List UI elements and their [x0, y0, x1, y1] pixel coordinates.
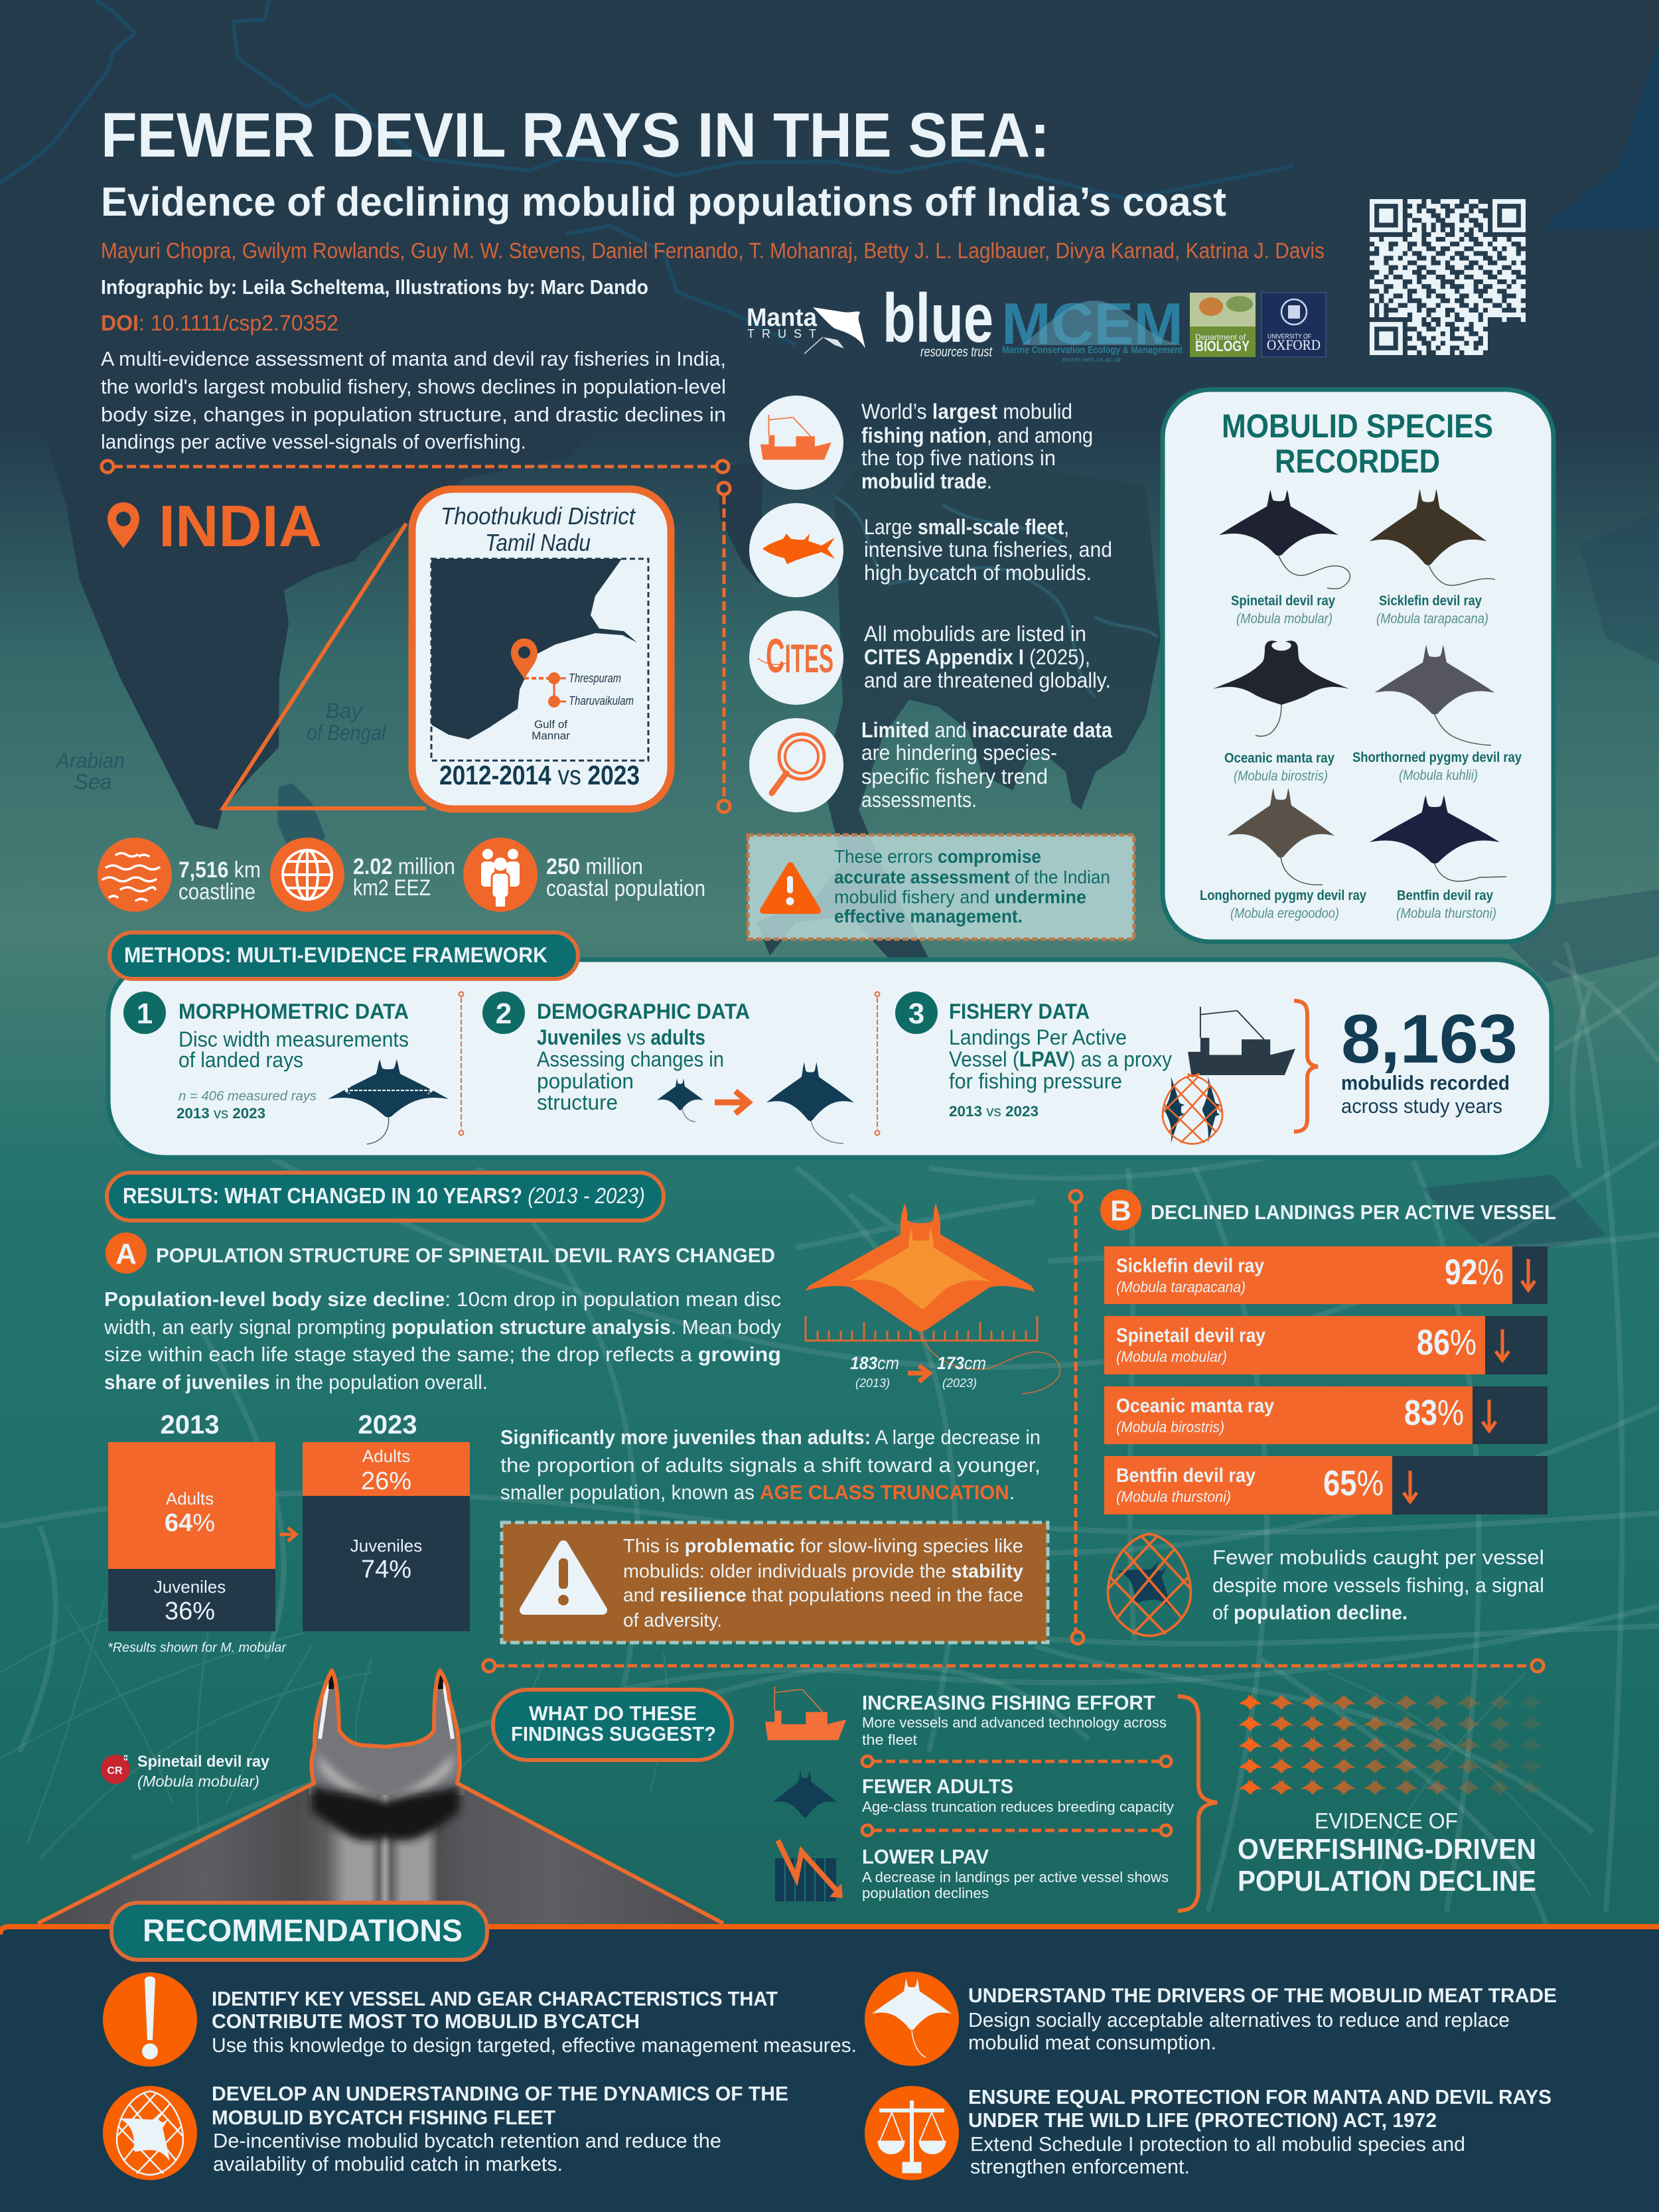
method 1: morphometric data: n = 406 measured rays [179, 1089, 317, 1104]
icon: location pin [108, 502, 139, 548]
fact: largest fishing nation: the top five nations in [861, 446, 1056, 470]
fact: CITES: All mobulids are listed in [864, 622, 1086, 646]
species: spinetail devil ray [1219, 490, 1350, 627]
chart: stacked bars 2013 vs 2023: 26% [361, 1467, 411, 1495]
intro text block [101, 347, 726, 453]
heading pill: recommendations: RECOMMENDATIONS [143, 1913, 463, 1948]
fact: limited data: Limited and inaccurate data [861, 718, 1112, 742]
intro text block: body size, changes in population structure, and drastic declines in [101, 403, 726, 426]
heading pill: methods [109, 932, 578, 979]
finding: increasing fishing effort: the fleet [862, 1732, 917, 1748]
species: oceanic manta ray: (Mobula birostris) [1234, 769, 1328, 784]
species status label: Spinetail devil ray [137, 1753, 270, 1771]
inset map [431, 559, 648, 761]
intro text block: the world's largest mobulid fishery, shows declines in population-level [101, 375, 726, 398]
species: longhorned pygmy devil ray [1200, 788, 1366, 921]
species: shorthorned pygmy devil ray: Shorthorned pygmy devil ray [1352, 750, 1522, 765]
conclusion text [1238, 1808, 1536, 1897]
method 2: demographic data: population [537, 1069, 634, 1093]
callout: problematic: This is problematic for slow-living species like [623, 1536, 1023, 1557]
logo: Manta Trust: TRUST [747, 327, 816, 340]
stat: EEZ [270, 838, 455, 912]
bar: oceanic manta 83%: Oceanic manta ray [1116, 1395, 1274, 1417]
callout: problematic: mobulids: older individuals provide the stability [623, 1561, 1023, 1582]
fact: CITES: and are threatened globally. [864, 668, 1111, 692]
zoom triangle lines [223, 524, 426, 808]
stat: 8,163 mobulids [1341, 1001, 1518, 1118]
bar: spinetail 86%: 86% [1417, 1323, 1477, 1363]
logo: Blue Resources Trust: blue [883, 280, 993, 357]
species status label [101, 1753, 270, 1790]
species: bentfin devil ray [1370, 795, 1506, 921]
map: India landmass [0, 0, 763, 830]
illustration: large spinetail devil ray [38, 1666, 723, 1923]
body size text: size within each life stage stayed the same; the drop reflects a growing [104, 1343, 781, 1366]
label: Arabian Sea: Arabian [55, 749, 125, 773]
section A [104, 1203, 1060, 1655]
fact: small-scale fleet: high bycatch of mobulids. [864, 561, 1092, 585]
stat: coastal population [463, 838, 705, 912]
stat: 8,163 mobulids: mobulids recorded [1341, 1071, 1510, 1094]
inset title: Thoothukudi District [441, 502, 636, 530]
fact: largest fishing nation: fishing nation, and among [861, 423, 1093, 447]
species: bentfin devil ray: Bentfin devil ray [1397, 888, 1493, 903]
label: Bay of Bengal [307, 699, 386, 745]
recommendation: vessel and gear [103, 1972, 857, 2067]
bar: oceanic manta 83%: 83% [1404, 1393, 1464, 1433]
callout: problematic [502, 1522, 1048, 1643]
method 3: fishery data [895, 992, 1295, 1144]
panel: mobulid species recorded [1163, 390, 1553, 942]
illustration: ray with ruler [805, 1203, 1060, 1394]
callout: errors warning: These errors compromise [834, 846, 1041, 867]
fact: CITES: CITES [766, 630, 833, 683]
separator [862, 1756, 1171, 1767]
recommendation: equal protection: Extend Schedule I protection to all mobulid species and [970, 2132, 1465, 2156]
logo: Department of Biology [1190, 293, 1256, 357]
recommendation: meat trade: UNDERSTAND THE DRIVERS OF THE MOBULID MEAT TRADE [968, 1984, 1557, 2007]
fact: small-scale fleet [749, 503, 1112, 597]
separator [862, 1825, 1171, 1836]
callout: errors warning: effective management. [834, 906, 1023, 926]
brace: findings [1178, 1696, 1217, 1911]
finding: lower LPAV: population declines [862, 1885, 989, 1901]
stat: coastal population: coastal population [546, 876, 705, 901]
credits: Infographic by: Leila Scheltema, Illustrations by: Marc Dando [101, 275, 648, 299]
brace [1294, 1001, 1318, 1132]
recommendation: bycatch fleet: availability of mobulid catch in markets. [213, 2152, 563, 2175]
bar: spinetail 86% [1104, 1316, 1548, 1374]
method 2: demographic data: DEMOGRAPHIC DATA [537, 999, 750, 1023]
fact: limited data: specific fishery trend [861, 765, 1048, 788]
inset map: Gulf of [534, 718, 567, 731]
method 1: morphometric data: 1 [137, 997, 153, 1030]
bar: bentfin 65% [1104, 1456, 1548, 1514]
method 3: fishery data: Vessel (LPAV) as a proxy [949, 1047, 1172, 1071]
badge A [106, 1232, 147, 1274]
icon: fishing boat [1188, 1007, 1295, 1075]
recommendation: equal protection: UNDER THE WILD LIFE (PROTECTION) ACT, 1972 [968, 2108, 1437, 2132]
label: Bay of Bengal: of Bengal [307, 721, 386, 745]
recommendation: equal protection: strengthen enforcement. [970, 2155, 1190, 2178]
heading pill: results [107, 1173, 664, 1220]
recommendation: meat trade: mobulid meat consumption. [968, 2031, 1216, 2054]
panel title: MOBULID SPECIES [1222, 407, 1493, 445]
method 3: fishery data: 2013 vs 2023 [949, 1103, 1039, 1120]
illustration: ray with ruler: 173cm [937, 1353, 986, 1373]
inset title: Tamil Nadu [485, 529, 591, 556]
logo: Blue Resources Trust: resources trust [920, 344, 993, 360]
method 1: morphometric data: 2013 vs 2023 [177, 1105, 265, 1122]
finding: increasing fishing effort: INCREASING FISHING EFFORT [862, 1691, 1155, 1714]
logo: MCEM: mcem.web.ox.ac.uk [1062, 356, 1121, 364]
stat: coastal population: 250 million [546, 854, 643, 879]
recommendation: bycatch fleet: DEVELOP AN UNDERSTANDING OF THE DYNAMICS OF THE [212, 2082, 788, 2105]
heading pill: what do these findings suggest [493, 1690, 732, 1760]
heading pill: results: RESULTS: WHAT CHANGED IN 10 YEARS? (2013 - 2023) [123, 1183, 645, 1208]
recommendation: vessel and gear: CONTRIBUTE MOST TO MOBULID BYCATCH [212, 2010, 640, 2033]
finding: lower LPAV: A decrease in landings per active vessel shows [862, 1869, 1169, 1885]
fact: largest fishing nation [749, 396, 1093, 493]
title: FEWER DEVIL RAYS IN THE SEA: [101, 100, 1050, 171]
callout: errors warning: mobulid fishery and undermine [834, 887, 1086, 907]
bar: sicklefin 92%: Sicklefin devil ray [1116, 1255, 1264, 1277]
logo: MCEM: Marine Conservation Ecology & Management [1002, 344, 1183, 356]
species status label: CR [107, 1765, 123, 1777]
finding: increasing fishing effort [765, 1686, 1167, 1748]
inset years: 2012-2014 vs 2023 [439, 760, 640, 790]
recommendation: bycatch fleet: MOBULID BYCATCH FISHING FLEET [212, 2106, 555, 2129]
chart: stacked bars 2013 vs 2023: Adults [362, 1446, 410, 1466]
logo: Manta Trust [747, 304, 865, 354]
finding: increasing fishing effort: More vessels and advanced technology across [862, 1714, 1167, 1731]
conclusion text: EVIDENCE OF [1315, 1808, 1458, 1833]
logo: Manta Trust: Manta [747, 304, 818, 332]
intro text block: A multi-evidence assessment of manta and devil ray fisheries in India, [101, 347, 726, 370]
species: sicklefin devil ray [1370, 489, 1495, 627]
callout: problematic: of adversity. [623, 1610, 722, 1631]
chart: stacked bars 2013 vs 2023: *Results shown for M. mobular [108, 1641, 287, 1655]
panel title [1222, 407, 1493, 480]
logo: Department of Biology: Department of [1195, 332, 1246, 342]
illustration: ray with ruler: 183cm [850, 1353, 899, 1373]
method 2: demographic data: 2 [496, 997, 512, 1030]
bar: spinetail 86%: Spinetail devil ray [1116, 1325, 1265, 1347]
callout: problematic: and resilience that populations need in the face [623, 1585, 1023, 1606]
fact: limited data: assessments. [861, 788, 977, 812]
heading pill: what do these findings suggest: FINDINGS SUGGEST? [511, 1722, 716, 1745]
finding: fewer adults [772, 1770, 1174, 1818]
recommendation: bycatch fleet: De-incentivise mobulid bycatch retention and reduce the [213, 2129, 721, 2152]
species: sicklefin devil ray: Sicklefin devil ray [1379, 593, 1482, 609]
stat: EEZ: 2.02 million [353, 854, 455, 879]
logo: University of Oxford: UNIVERSITY OF [1267, 332, 1311, 340]
section A heading: POPULATION STRUCTURE OF SPINETAIL DEVIL RAYS CHANGED [156, 1244, 775, 1267]
recommendation: equal protection [865, 2085, 1551, 2180]
divider [875, 992, 880, 1135]
method 1: morphometric data [123, 992, 449, 1144]
panel: recommendations [0, 1903, 1659, 2212]
illustration: ray with ruler: (2023) [942, 1376, 977, 1390]
map: country borders [0, 0, 1294, 345]
bar: sicklefin 92%: 92% [1445, 1252, 1504, 1292]
method 2: demographic data: structure [537, 1090, 618, 1114]
recommendation: equal protection: ENSURE EQUAL PROTECTION FOR MANTA AND DEVIL RAYS [968, 2085, 1551, 2108]
method 3: fishery data: Landings Per Active [949, 1025, 1127, 1049]
species: spinetail devil ray: Spinetail devil ray [1231, 593, 1335, 609]
icon: net with rays [1163, 1074, 1222, 1144]
logo: Department of Biology: BIOLOGY [1195, 338, 1250, 354]
fact: largest fishing nation: mobulid trade. [861, 469, 992, 493]
chart: stacked bars 2013 vs 2023: 74% [361, 1556, 411, 1584]
takeaway text: Fewer mobulids caught per vessel [1212, 1546, 1544, 1569]
connector: section B vertical [1070, 1191, 1084, 1644]
bar: sicklefin 92%: (Mobula tarapacana) [1116, 1278, 1246, 1295]
label: Bay of Bengal: Bay [325, 699, 364, 723]
body size text: share of juveniles in the population overall. [104, 1370, 488, 1394]
badge B: B [1110, 1195, 1131, 1227]
connector: vertical dashed line [718, 482, 730, 812]
fishing net pattern [0, 942, 1659, 1925]
chart: stacked bars 2013 vs 2023: 2013 [161, 1410, 219, 1439]
takeaway text: despite more vessels fishing, a signal [1212, 1574, 1544, 1597]
method 1: morphometric data: of landed rays [179, 1048, 303, 1072]
bar: oceanic manta 83%: (Mobula birostris) [1116, 1418, 1224, 1436]
recommendation: meat trade [865, 1972, 1557, 2066]
fact: small-scale fleet: intensive tuna fisheries, and [864, 538, 1112, 561]
takeaway text: of population decline. [1212, 1601, 1407, 1624]
body size text: Population-level body size decline : 10cm drop in population mean disc [104, 1288, 781, 1311]
panel: study site inset [412, 489, 671, 809]
stat: coastline: coastline [179, 879, 255, 905]
badge A: A [115, 1238, 137, 1270]
method 2: demographic data: Assessing changes in [537, 1047, 724, 1071]
ghost text behind results: Juveniles vs Adults [474, 1217, 595, 1235]
species: spinetail devil ray: (Mobula mobular) [1236, 611, 1333, 627]
age class truncation text: smaller population, known as AGE CLASS TRUNCATION. [500, 1481, 1015, 1504]
species: longhorned pygmy devil ray: Longhorned pygmy devil ray [1200, 888, 1366, 903]
bar: bentfin 65%: 65% [1323, 1463, 1384, 1503]
conclusion text: POPULATION DECLINE [1238, 1865, 1536, 1897]
chart: stacked bars 2013 vs 2023: 2023 [358, 1410, 417, 1439]
section B heading: DECLINED LANDINGS PER ACTIVE VESSEL [1151, 1201, 1556, 1224]
label: Arabian Sea [55, 749, 125, 794]
method 2: demographic data [482, 992, 854, 1143]
method 1: morphometric data: Disc width measurements [179, 1027, 409, 1051]
logo: University of Oxford [1262, 293, 1326, 357]
authors: Mayuri Chopra, Gwilym Rowlands, Guy M. W. Stevens, Daniel Fernando, T. Mohanraj, Betty J. L. Laglbauer, Divya Karnad, Katrina J. Davis [101, 238, 1325, 263]
QR code [1370, 202, 1526, 352]
connector: horizontal dashed line [102, 461, 729, 473]
chart: stacked bars 2013 vs 2023: Juveniles [154, 1577, 226, 1597]
finding: fewer adults: Age-class truncation reduces breeding capacity [862, 1799, 1174, 1815]
species: shorthorned pygmy devil ray: (Mobula kuhlii) [1399, 768, 1478, 783]
species: sicklefin devil ray: (Mobula tarapacana) [1376, 611, 1488, 627]
finding: lower LPAV: LOWER LPAV [862, 1845, 989, 1868]
method 2: demographic data: Juveniles vs adults [537, 1025, 705, 1049]
fact: CITES [749, 611, 1111, 705]
inset title [441, 502, 636, 556]
recommendation: vessel and gear: Use this knowledge to design targeted, effective management measures. [212, 2033, 857, 2057]
bar: bentfin 65%: (Mobula thurstoni) [1116, 1488, 1231, 1505]
inset map: Threspuram [569, 672, 621, 685]
species: longhorned pygmy devil ray: (Mobula eregoodoo) [1230, 906, 1339, 921]
bar: bentfin 65%: Bentfin devil ray [1116, 1465, 1256, 1487]
body size text [104, 1288, 781, 1394]
DOI: DOI: 10.1111/csp2.70352 [101, 311, 338, 335]
heading pill: what do these findings suggest: WHAT DO THESE [529, 1702, 697, 1725]
heading pill: methods: METHODS: MULTI-EVIDENCE FRAMEWORK [124, 943, 547, 967]
recommendation: meat trade: Design socially acceptable alternatives to reduce and replace [968, 2008, 1510, 2031]
recommendation: bycatch fleet [103, 2082, 788, 2180]
ghost text behind results [474, 1217, 707, 1251]
label: Arabian Sea: Sea [74, 770, 111, 794]
net pattern, fine lines [0, 1593, 1593, 1898]
panel title: RECORDED [1275, 443, 1440, 480]
chart: stacked bars 2013 vs 2023: Juveniles [350, 1536, 422, 1556]
stat: EEZ: km2 EEZ [353, 875, 431, 901]
method 3: fishery data: FISHERY DATA [949, 999, 1090, 1023]
species: oceanic manta ray: Oceanic manta ray [1224, 751, 1334, 766]
panel: methods [108, 960, 1551, 1157]
age class truncation text: the proportion of adults signals a shift toward a younger, [500, 1453, 1041, 1477]
fact: limited data [749, 718, 1112, 812]
recommendation: vessel and gear: IDENTIFY KEY VESSEL AND GEAR CHARACTERISTICS THAT [212, 1987, 778, 2010]
stat: 8,163 mobulids: across study years [1341, 1094, 1502, 1118]
inset map: Tharuvaikulam [569, 694, 634, 707]
chart: stacked bars 2013 vs 2023 [108, 1410, 470, 1655]
map: Sri Lanka [277, 783, 325, 856]
inset map: Mannar [532, 729, 570, 742]
chart: stacked bars 2013 vs 2023: 36% [165, 1597, 215, 1625]
age class truncation text [500, 1426, 1041, 1504]
finding: lower LPAV [775, 1840, 1169, 1901]
conclusion text: OVERFISHING-DRIVEN [1238, 1833, 1536, 1866]
section B [1100, 1189, 1556, 1636]
species status label: (Mobula mobular) [137, 1773, 259, 1790]
method 1: morphometric data: MORPHOMETRIC DATA [179, 999, 409, 1023]
takeaway text [1212, 1546, 1544, 1624]
pictogram: fading ray grid [1238, 1694, 1543, 1795]
logo: University of Oxford: OXFORD [1267, 336, 1321, 353]
callout: errors warning: accurate assessment of the Indian [834, 867, 1110, 887]
illustration: ray with ruler: (2013) [855, 1376, 890, 1390]
stat: coastline [98, 838, 261, 912]
age class truncation text: Significantly more juveniles than adults: A large decrease in [500, 1426, 1041, 1449]
icon: net with ray [1108, 1534, 1190, 1636]
heading pill: recommendations [111, 1903, 487, 1960]
stat: 8,163 mobulids: 8,163 [1341, 1001, 1518, 1078]
intro text block: landings per active vessel-signals of overfishing. [101, 430, 526, 453]
callout: errors warning [748, 835, 1134, 939]
species: oceanic manta ray [1213, 640, 1349, 784]
species: shorthorned pygmy devil ray [1352, 645, 1522, 783]
logo: MCEM: MCEM [1001, 291, 1183, 356]
body size text: width, an early signal prompting population structure analysis. Mean body [104, 1315, 781, 1339]
connector: findings horizontal [483, 1660, 1544, 1672]
subtitle: Evidence of declining mobulid populations off India’s coast [101, 179, 1226, 224]
bar: sicklefin 92% [1104, 1246, 1548, 1304]
bar: oceanic manta 83% [1104, 1386, 1548, 1444]
chart: stacked bars 2013 vs 2023: 64% [165, 1509, 215, 1537]
fact: CITES: CITES Appendix I (2025), [864, 645, 1090, 669]
chart: stacked bars 2013 vs 2023: Adults [166, 1489, 214, 1509]
divider [459, 992, 463, 1135]
method 3: fishery data: 3 [908, 997, 924, 1030]
heading: India: INDIA [159, 493, 322, 559]
fact: small-scale fleet: Large small-scale fleet, [864, 515, 1069, 539]
ghost text behind results: Assessing age structure and maturity [474, 1233, 707, 1251]
finding: fewer adults: FEWER ADULTS [862, 1775, 1013, 1798]
stat: coastline: 7,516 km [179, 857, 261, 883]
badge B [1100, 1189, 1141, 1230]
method 3: fishery data: for fishing pressure [949, 1069, 1122, 1093]
species: bentfin devil ray: (Mobula thurstoni) [1396, 906, 1496, 921]
bar: spinetail 86%: (Mobula mobular) [1116, 1348, 1227, 1365]
fact: limited data: are hindering species- [861, 741, 1057, 765]
fact: largest fishing nation: World’s largest mobulid [861, 400, 1072, 423]
